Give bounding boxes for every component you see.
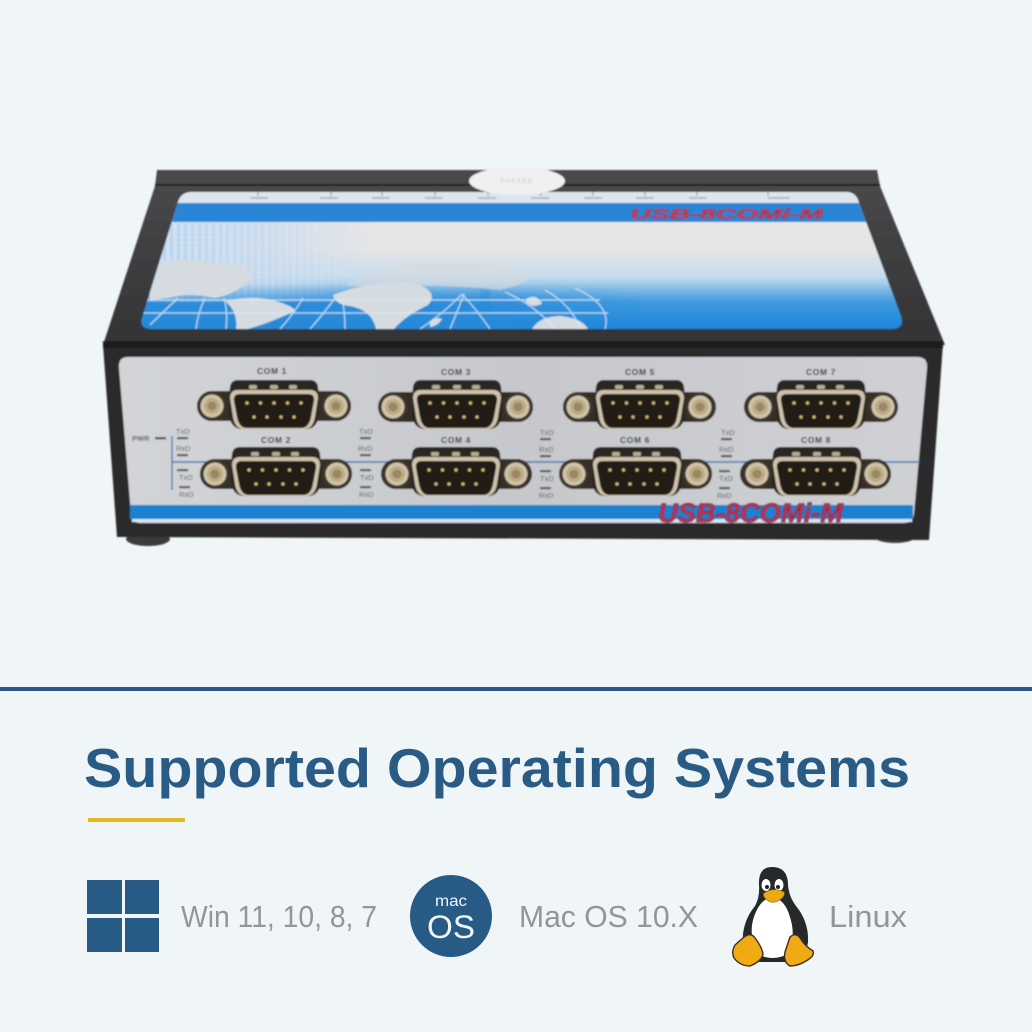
connector COM 3 [378,367,533,429]
label: windows versions: Win 11, 10, 8, 7 [181,899,377,934]
rubber feet [126,531,915,546]
heading: Supported Operating Systems [84,737,910,799]
front of metal case [103,341,943,540]
top model name: USB-8COMi-M [630,206,824,223]
TxD RxD LED labels column 1 [176,427,194,499]
TxD RxD LED labels column 2 [358,427,374,499]
connector COM 7: COM 7 [806,367,836,377]
QC sticker: PASSED [501,179,533,185]
TxD RxD LED labels column 4: TxD [719,474,733,483]
connector COM 4: COM 4 [441,435,471,445]
front panel [119,357,927,523]
icon: macOS badge [410,875,492,957]
connector COM 6: COM 6 [620,435,650,445]
TxD RxD LED labels column 3: RxD [539,491,554,500]
map ocean band [146,285,490,328]
connector COM 5: COM 5 [625,367,655,377]
connector COM 2: COM 2 [261,435,291,445]
connector COM 8: COM 8 [801,435,831,445]
TxD RxD LED labels column 2: RxD [358,444,373,453]
PWR indicator: PWR [132,434,150,443]
TxD RxD LED labels column 1: RxD [176,444,191,453]
icon: macOS badge: OS [427,909,475,945]
TxD RxD LED labels column 1: RxD [179,490,194,499]
TxD RxD LED labels column 3 [539,428,554,500]
label: linux: Linux [829,899,908,934]
TxD RxD LED labels column 3: TxD [540,428,554,437]
top of metal case [103,170,945,345]
connector COM 3: COM 3 [441,367,471,377]
TxD RxD LED labels column 1: TxD [176,427,190,436]
TxD RxD LED labels column 3: TxD [540,474,554,483]
TxD RxD LED labels column 4: RxD [719,445,734,454]
TxD RxD LED labels column 2: RxD [359,490,374,499]
PWR indicator [132,434,166,443]
connector COM 1 [197,366,351,429]
connector COM 7 [744,367,898,429]
QC sticker [469,167,565,195]
connector COM 6 [559,435,712,496]
TxD RxD LED labels column 1: TxD [179,473,193,482]
connector COM 2 [200,435,352,496]
connector COM 8 [740,435,891,496]
connector COM 4 [381,435,532,496]
front model name: USB-8COMi-M [658,498,844,528]
TxD RxD LED labels column 4: RxD [717,491,732,500]
connector COM 5 [563,367,716,429]
heading accent line [88,818,185,822]
panel circuit lines [172,436,920,490]
TxD RxD LED labels column 4 [717,428,735,500]
divider line [0,687,1032,691]
TxD RxD LED labels column 2: TxD [360,473,374,482]
icon: windows logo [87,880,159,952]
TxD RxD LED labels column 2: TxD [359,427,373,436]
map grid lines [140,288,608,329]
connector COM 1: COM 1 [257,366,287,376]
TxD RxD LED labels column 4: TxD [721,428,735,437]
product photo: 8-port serial hub [103,167,945,546]
icon: linux penguin [733,867,813,966]
icon: macOS badge: mac [435,893,467,910]
top label with world map [130,190,910,330]
port tick marks [258,192,768,196]
world map continents [150,260,588,329]
TxD RxD LED labels column 3: RxD [539,445,554,454]
label: mac version: Mac OS 10.X [519,899,698,934]
